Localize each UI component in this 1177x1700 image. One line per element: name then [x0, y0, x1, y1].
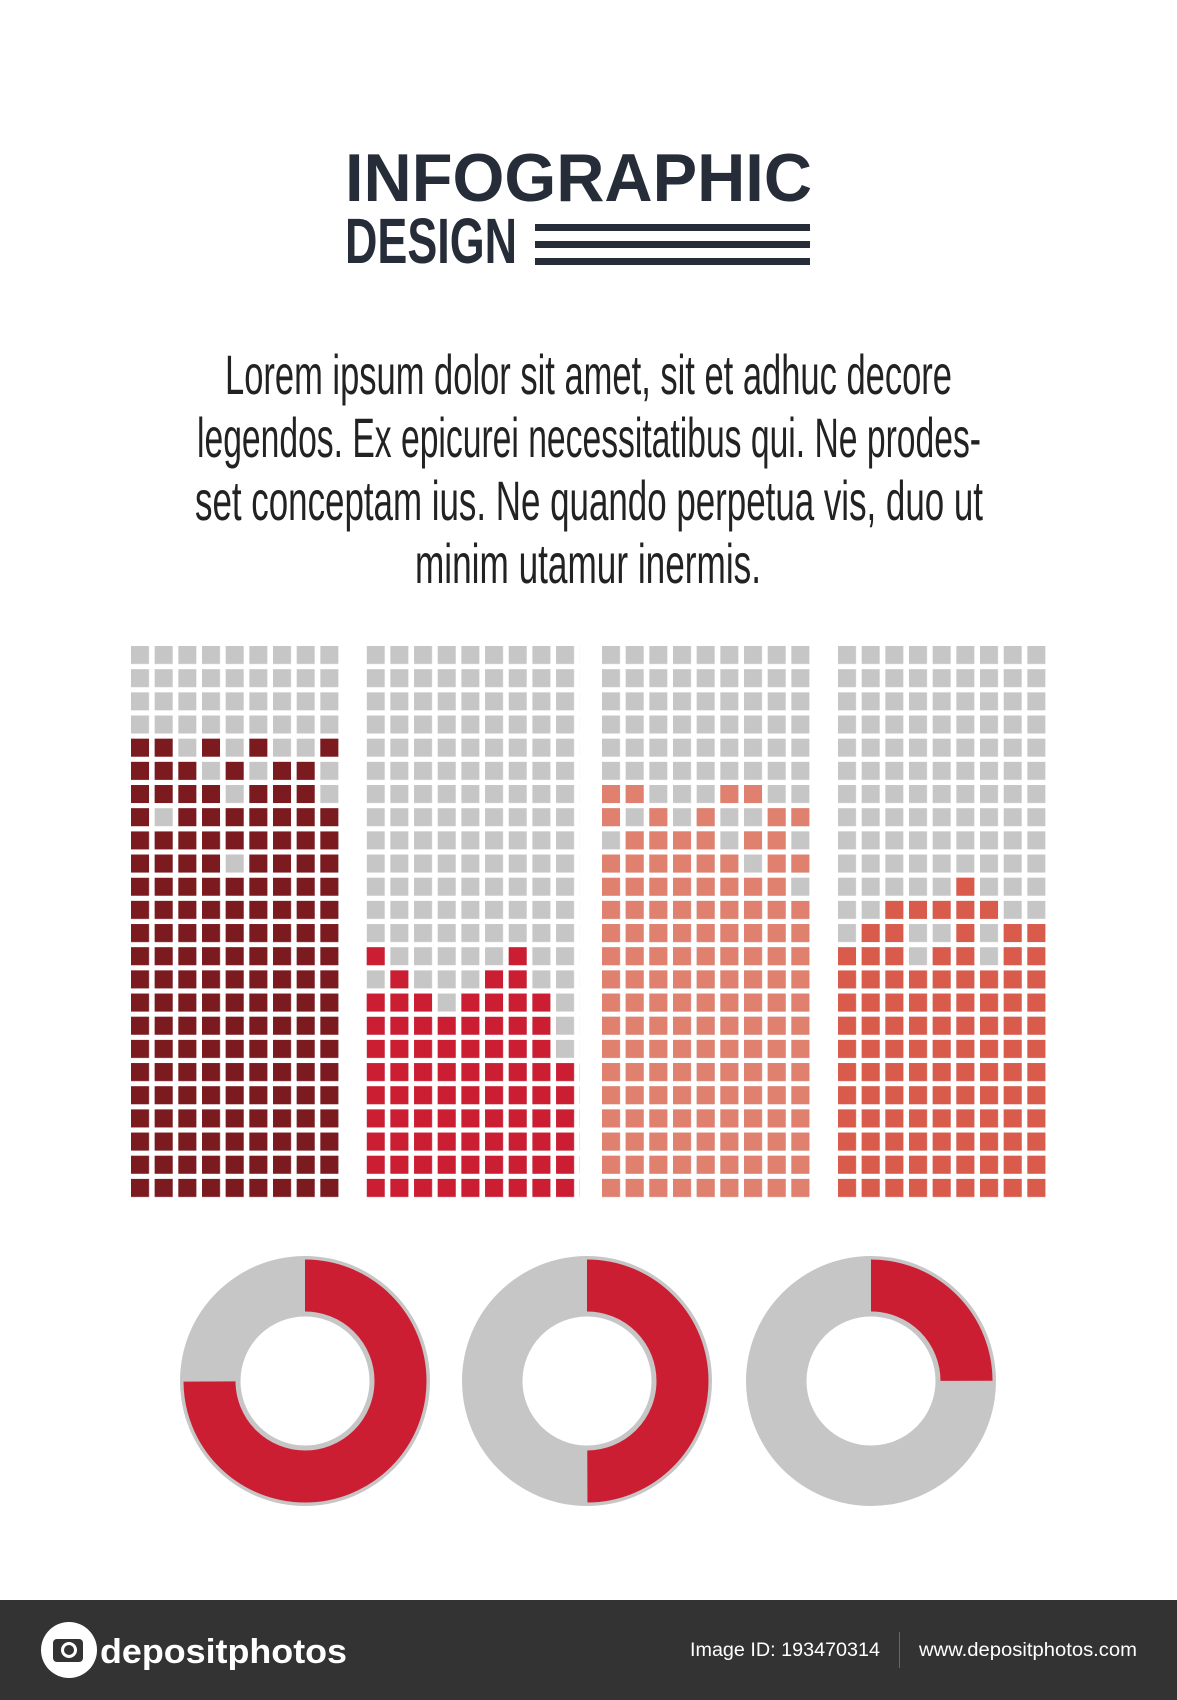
- donut chart 50%: [462, 1256, 712, 1506]
- paragraph text: minim utamur inermis.: [415, 532, 761, 595]
- bar chart: salmon grid: [602, 646, 815, 1198]
- title: INFOGRAPHIC: [345, 140, 812, 216]
- footer brand: depositphotos: [100, 1633, 347, 1671]
- title: DESIGN: [345, 205, 517, 277]
- icon: camera logo: [41, 1622, 97, 1678]
- footer bar: [0, 1600, 1177, 1700]
- donut chart 25%: [746, 1256, 996, 1506]
- bar chart: dark red grid: [131, 646, 344, 1198]
- title: [345, 140, 812, 277]
- bar chart: coral grid: [838, 646, 1051, 1198]
- bar chart: red grid: [367, 646, 580, 1198]
- footer url: www.depositphotos.com: [918, 1640, 1137, 1661]
- footer image id: Image ID: 193470314: [690, 1640, 880, 1661]
- paragraph text: [195, 343, 983, 595]
- donut chart 75%: [180, 1256, 430, 1506]
